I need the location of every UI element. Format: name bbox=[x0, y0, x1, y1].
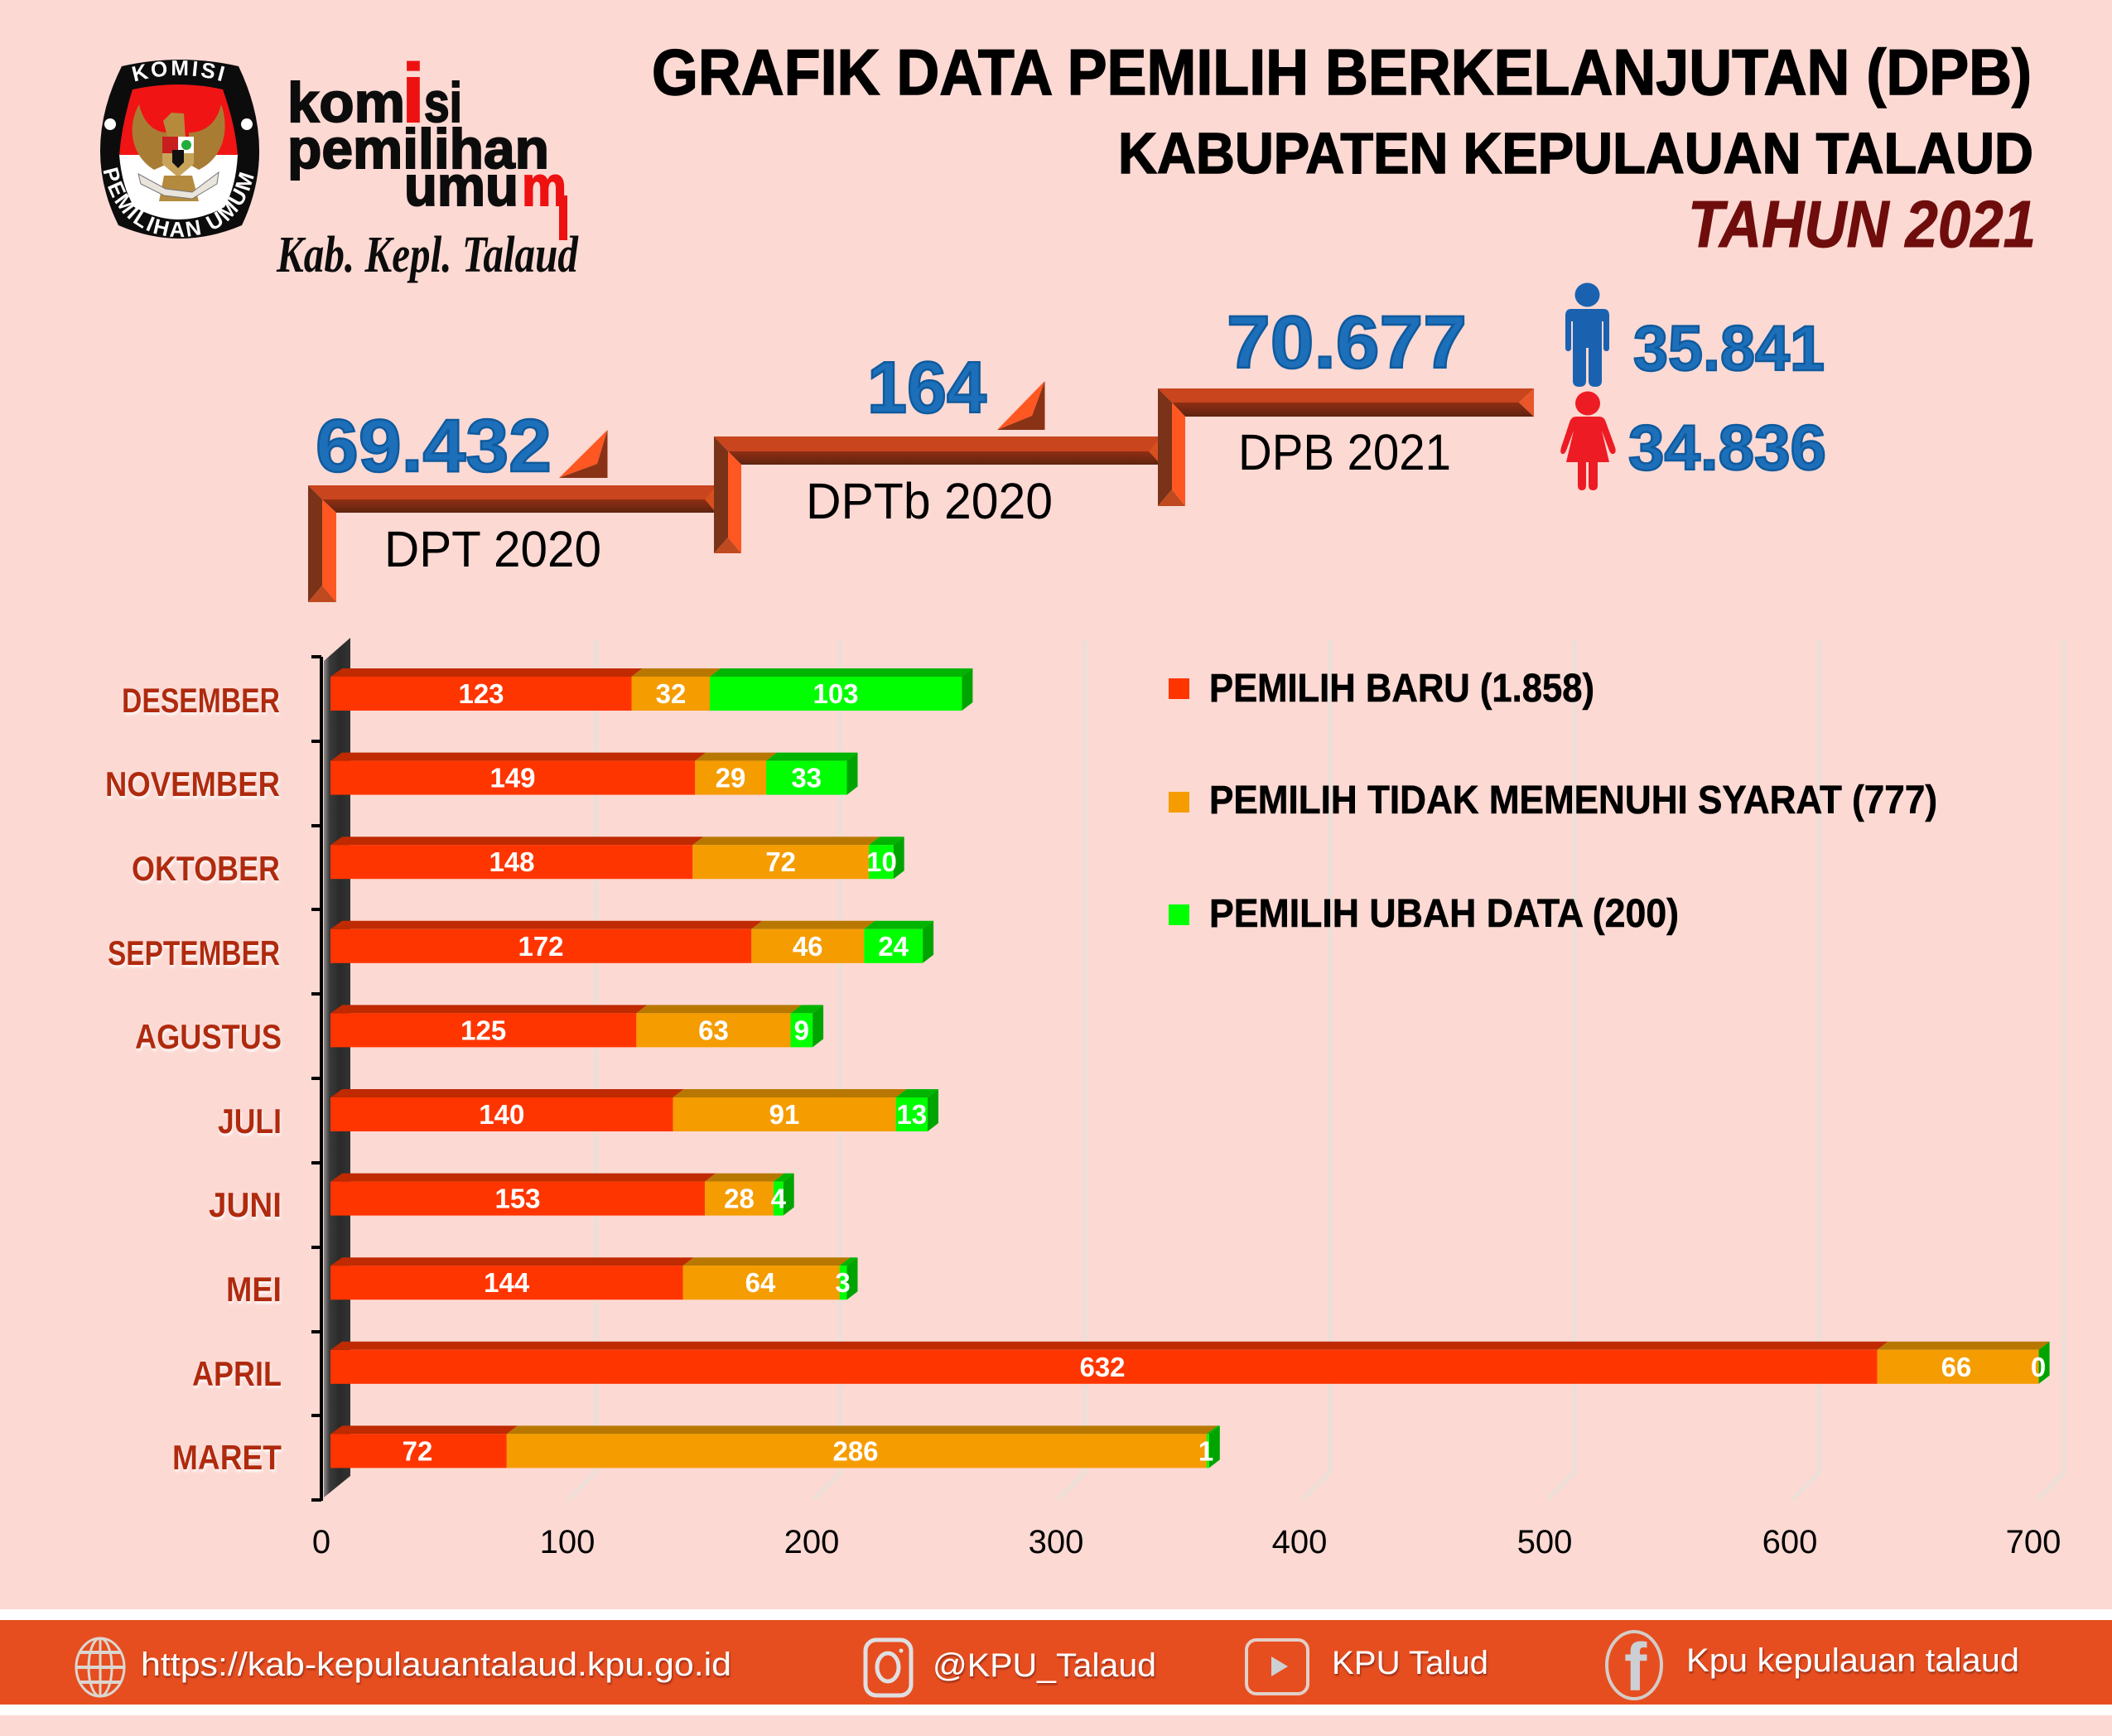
segment: pemilih baru 140: 140 bbox=[479, 1099, 524, 1130]
x axis labels: 500 bbox=[1517, 1524, 1572, 1560]
category labels: APRIL bbox=[192, 1354, 282, 1393]
segment: tidak memenuhi syarat 91 bbox=[673, 1089, 907, 1131]
segment: pemilih baru 172: 172 bbox=[518, 931, 564, 962]
segment: ubah data 13 bbox=[896, 1089, 938, 1131]
segment: tidak memenuhi syarat 28 bbox=[705, 1174, 784, 1216]
step: DPB 2021 bbox=[1158, 301, 1534, 506]
x axis labels: 600 bbox=[1762, 1524, 1817, 1560]
logo wordmark: kom bbox=[287, 71, 405, 134]
segment: ubah data 10 bbox=[866, 837, 904, 879]
segment: ubah data 1: 1 bbox=[1198, 1435, 1213, 1466]
legend item: pemilih baru: PEMILIH BARU (1.858) bbox=[1209, 667, 1594, 711]
segment: tidak memenuhi syarat 64 bbox=[682, 1257, 851, 1300]
bar: September bbox=[330, 921, 933, 963]
segment: tidak memenuhi syarat 64: 64 bbox=[745, 1267, 776, 1298]
bar: Oktober bbox=[330, 837, 904, 879]
logo wordmark: pemilihan bbox=[287, 118, 549, 181]
axis line and ticks bbox=[311, 655, 323, 1502]
bar: Juni bbox=[330, 1174, 794, 1216]
segment: tidak memenuhi syarat 29: 29 bbox=[716, 763, 745, 793]
axis wall bbox=[324, 638, 350, 1497]
segment: tidak memenuhi syarat 66 bbox=[1878, 1342, 2050, 1384]
segment: tidak memenuhi syarat 63 bbox=[636, 1005, 802, 1047]
segment: tidak memenuhi syarat 91: 91 bbox=[769, 1099, 799, 1130]
segment: tidak memenuhi syarat 32: 32 bbox=[656, 678, 686, 709]
bar: Maret bbox=[330, 1425, 1220, 1468]
segment: ubah data 0 bbox=[2031, 1342, 2050, 1384]
segment: pemilih baru 153 bbox=[330, 1174, 716, 1216]
segment: ubah data 3: 3 bbox=[835, 1267, 851, 1298]
arrow marker bbox=[997, 381, 1045, 430]
segment: pemilih baru 123 bbox=[330, 668, 643, 711]
logo: KPU emblem: PEMILIHAN UMUM bbox=[103, 167, 254, 237]
icon: youtube bbox=[1246, 1640, 1308, 1694]
segment: ubah data 24: 24 bbox=[878, 931, 909, 962]
value: 164 bbox=[867, 346, 986, 428]
segment: ubah data 33: 33 bbox=[791, 763, 822, 793]
segment: pemilih baru 172 bbox=[330, 921, 762, 963]
segment: tidak memenuhi syarat 66: 66 bbox=[1941, 1352, 1971, 1382]
segment: pemilih baru 632 bbox=[330, 1342, 1888, 1384]
value: men: 35.841 bbox=[1633, 313, 1825, 384]
logo wordmark: i bbox=[402, 47, 425, 140]
segment: tidak memenuhi syarat 32 bbox=[631, 668, 721, 711]
title: GRAFIK DATA PEMILIH BERKELANJUTAN (DPB) bbox=[652, 36, 2032, 108]
logo wordmark: umu bbox=[404, 155, 518, 218]
segment: pemilih baru 72 bbox=[330, 1425, 518, 1468]
segment: tidak memenuhi syarat 46 bbox=[751, 921, 875, 963]
segment: ubah data 24 bbox=[864, 921, 933, 963]
bar: Agustus bbox=[330, 1005, 823, 1047]
title bbox=[652, 36, 2036, 261]
facebook name: Kpu kepulauan talaud bbox=[1686, 1642, 2019, 1679]
segment: pemilih baru 125: 125 bbox=[460, 1015, 506, 1045]
legend bbox=[1169, 667, 1937, 936]
x axis labels: 100 bbox=[540, 1524, 595, 1560]
category labels: MARET bbox=[172, 1438, 282, 1477]
x axis labels: 0 bbox=[312, 1524, 330, 1560]
bar: Mei bbox=[330, 1257, 858, 1300]
segment: pemilih baru 153: 153 bbox=[494, 1184, 541, 1214]
grid lines bbox=[569, 639, 2064, 1499]
segment: pemilih baru 144: 144 bbox=[484, 1267, 530, 1298]
segment: ubah data 3 bbox=[835, 1257, 858, 1300]
segment: ubah data 33 bbox=[766, 753, 858, 795]
website: https://kab-kepulauantalaud.kpu.go.id bbox=[141, 1647, 731, 1683]
segment: ubah data 9: 9 bbox=[794, 1015, 809, 1045]
icon: facebook: f bbox=[1624, 1630, 1647, 1705]
segment: pemilih baru 144 bbox=[330, 1257, 694, 1300]
category labels: SEPTEMBER bbox=[108, 933, 280, 972]
segment: pemilih baru 72: 72 bbox=[403, 1435, 432, 1466]
bar: April bbox=[330, 1342, 2050, 1384]
category labels: OKTOBER bbox=[132, 849, 280, 888]
youtube name: KPU Talud bbox=[1332, 1645, 1488, 1681]
legend item: pemilih tidak memenuhi syarat: PEMILIH TIDAK MEMENUHI SYARAT (777) bbox=[1209, 779, 1937, 822]
emblem text: KOMISI bbox=[132, 60, 225, 81]
step: DPTb 2020 bbox=[714, 346, 1158, 553]
garuda emblem bbox=[133, 104, 225, 201]
logo wordmark: si bbox=[424, 71, 462, 134]
segment: ubah data 9 bbox=[790, 1005, 823, 1047]
bar chart bbox=[105, 638, 2064, 1560]
segment: pemilih baru 149: 149 bbox=[489, 763, 536, 793]
year: TAHUN 2021 bbox=[1688, 187, 2036, 261]
bar: Desember bbox=[330, 668, 972, 711]
category labels: JUNI bbox=[209, 1185, 282, 1224]
category labels bbox=[105, 681, 282, 1477]
icon: woman bbox=[1560, 391, 1616, 490]
value: 69.432 bbox=[316, 405, 552, 488]
label: DPB 2021 bbox=[1238, 424, 1451, 480]
category labels: NOVEMBER bbox=[105, 764, 280, 803]
icon: facebook bbox=[1607, 1630, 1661, 1705]
segment: tidak memenuhi syarat 72: 72 bbox=[765, 846, 796, 877]
footer bbox=[0, 1609, 2112, 1715]
logo wordmark: Kab. Kepl. Talaud bbox=[276, 227, 579, 283]
segment: tidak memenuhi syarat 286 bbox=[507, 1425, 1218, 1468]
value: 70.677 bbox=[1227, 301, 1467, 384]
segment: tidak memenuhi syarat 28: 28 bbox=[724, 1184, 755, 1214]
category labels: AGUSTUS bbox=[135, 1017, 282, 1056]
category labels: DESEMBER bbox=[122, 681, 280, 720]
category labels: JULI bbox=[218, 1102, 282, 1140]
segment: ubah data 4: 4 bbox=[771, 1184, 787, 1214]
logo: KPU emblem bbox=[99, 60, 260, 239]
segment: ubah data 103 bbox=[710, 668, 972, 711]
subtitle: KABUPATEN KEPULAUAN TALAUD bbox=[1118, 121, 2033, 186]
segment: pemilih baru 123: 123 bbox=[458, 678, 504, 709]
label: DPT 2020 bbox=[384, 521, 601, 577]
segment: pemilih baru 149 bbox=[330, 753, 706, 795]
logo wordmark: m bbox=[522, 155, 567, 218]
bar: November bbox=[330, 753, 858, 795]
segment: ubah data 1 bbox=[1198, 1425, 1220, 1468]
step: DPT 2020 bbox=[308, 405, 714, 602]
label: DPTb 2020 bbox=[806, 473, 1053, 529]
segment: pemilih baru 148 bbox=[330, 837, 703, 879]
segment: tidak memenuhi syarat 286: 286 bbox=[832, 1435, 879, 1466]
segment: pemilih baru 125 bbox=[330, 1005, 647, 1047]
icon: man bbox=[1565, 283, 1609, 387]
segment: tidak memenuhi syarat 72 bbox=[692, 837, 880, 879]
logo wordmark bbox=[276, 47, 579, 283]
x axis labels bbox=[312, 1524, 2061, 1560]
segment: pemilih baru 632: 632 bbox=[1079, 1352, 1126, 1382]
segment: tidak memenuhi syarat 29 bbox=[695, 753, 777, 795]
segment: ubah data 103: 103 bbox=[812, 678, 859, 709]
segment: pemilih baru 148: 148 bbox=[489, 846, 535, 877]
arrow marker bbox=[559, 430, 608, 478]
x axis labels: 700 bbox=[2006, 1524, 2061, 1560]
icon: instagram bbox=[866, 1640, 911, 1695]
segment: ubah data 0: 0 bbox=[2031, 1352, 2046, 1382]
bar: Juli bbox=[330, 1089, 938, 1131]
legend item: pemilih ubah data: PEMILIH UBAH DATA (200) bbox=[1209, 892, 1679, 936]
segment: tidak memenuhi syarat 63: 63 bbox=[698, 1015, 729, 1045]
instagram handle: @KPU_Talaud bbox=[933, 1647, 1156, 1684]
segment: ubah data 4 bbox=[771, 1174, 794, 1216]
x axis labels: 400 bbox=[1272, 1524, 1327, 1560]
category labels: MEI bbox=[226, 1270, 282, 1309]
value: women: 34.836 bbox=[1628, 412, 1826, 484]
segment: ubah data 10: 10 bbox=[866, 846, 897, 877]
icon: globe bbox=[76, 1638, 124, 1696]
segment: pemilih baru 140 bbox=[330, 1089, 684, 1131]
x axis labels: 300 bbox=[1029, 1524, 1083, 1560]
x axis labels: 200 bbox=[784, 1524, 839, 1560]
segment: ubah data 13: 13 bbox=[896, 1099, 927, 1130]
segment: tidak memenuhi syarat 46: 46 bbox=[793, 931, 823, 962]
